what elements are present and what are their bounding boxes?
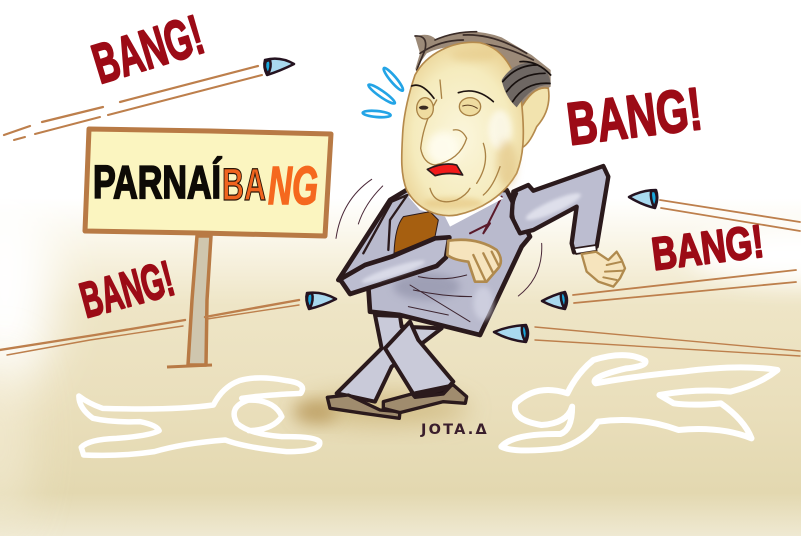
chalk outline: right body (501, 355, 777, 450)
sweat drops (362, 66, 405, 118)
shirt collar (408, 188, 503, 227)
bullet: right lower (494, 325, 528, 342)
eyebrows (412, 85, 493, 102)
signature: JOTA.Δ (420, 422, 489, 438)
shoes (327, 385, 467, 418)
man caricature (327, 32, 625, 418)
BANG left: BANG! (74, 250, 180, 329)
bullet: right upper (629, 190, 657, 208)
sleeve highlight (523, 189, 583, 224)
sign: PARNAÍBANG (85, 129, 331, 367)
hair side (502, 61, 551, 107)
sign text: NG (268, 156, 318, 216)
mouth (427, 164, 463, 176)
BANG top right: BANG! (563, 75, 706, 158)
outstretched hand (582, 252, 625, 287)
jacket shading (393, 197, 502, 322)
head (402, 42, 523, 216)
bullets (264, 59, 657, 342)
left eye (417, 98, 433, 119)
hand on chest (447, 240, 501, 282)
bullet: mid left (306, 293, 336, 309)
trousers (337, 315, 453, 402)
sign post (167, 236, 212, 367)
bullet: top left (264, 59, 294, 75)
motion lines (336, 179, 542, 296)
folded arm highlight (360, 257, 426, 286)
ear (520, 88, 549, 148)
nose (421, 100, 467, 165)
outstretched sleeve (512, 166, 608, 252)
wrinkles (430, 80, 500, 202)
folded arm sleeve (340, 237, 449, 294)
sign text (93, 156, 318, 216)
chalk outline: left body (79, 378, 320, 455)
lapel left (363, 195, 407, 253)
shirt cuff (574, 245, 597, 254)
face features (412, 80, 500, 202)
BANG right: BANG! (649, 215, 766, 280)
sign text: PARNAÍ (93, 156, 222, 208)
jacket body (338, 190, 530, 335)
head shading (423, 48, 517, 209)
hair top (415, 32, 551, 107)
brown tie (394, 212, 438, 253)
shoulder fold (512, 193, 517, 228)
right eye (459, 98, 481, 116)
bullet: right middle (542, 292, 567, 309)
sign text: BA (222, 159, 266, 210)
sign board (85, 129, 331, 236)
bullet trails (0, 66, 800, 356)
